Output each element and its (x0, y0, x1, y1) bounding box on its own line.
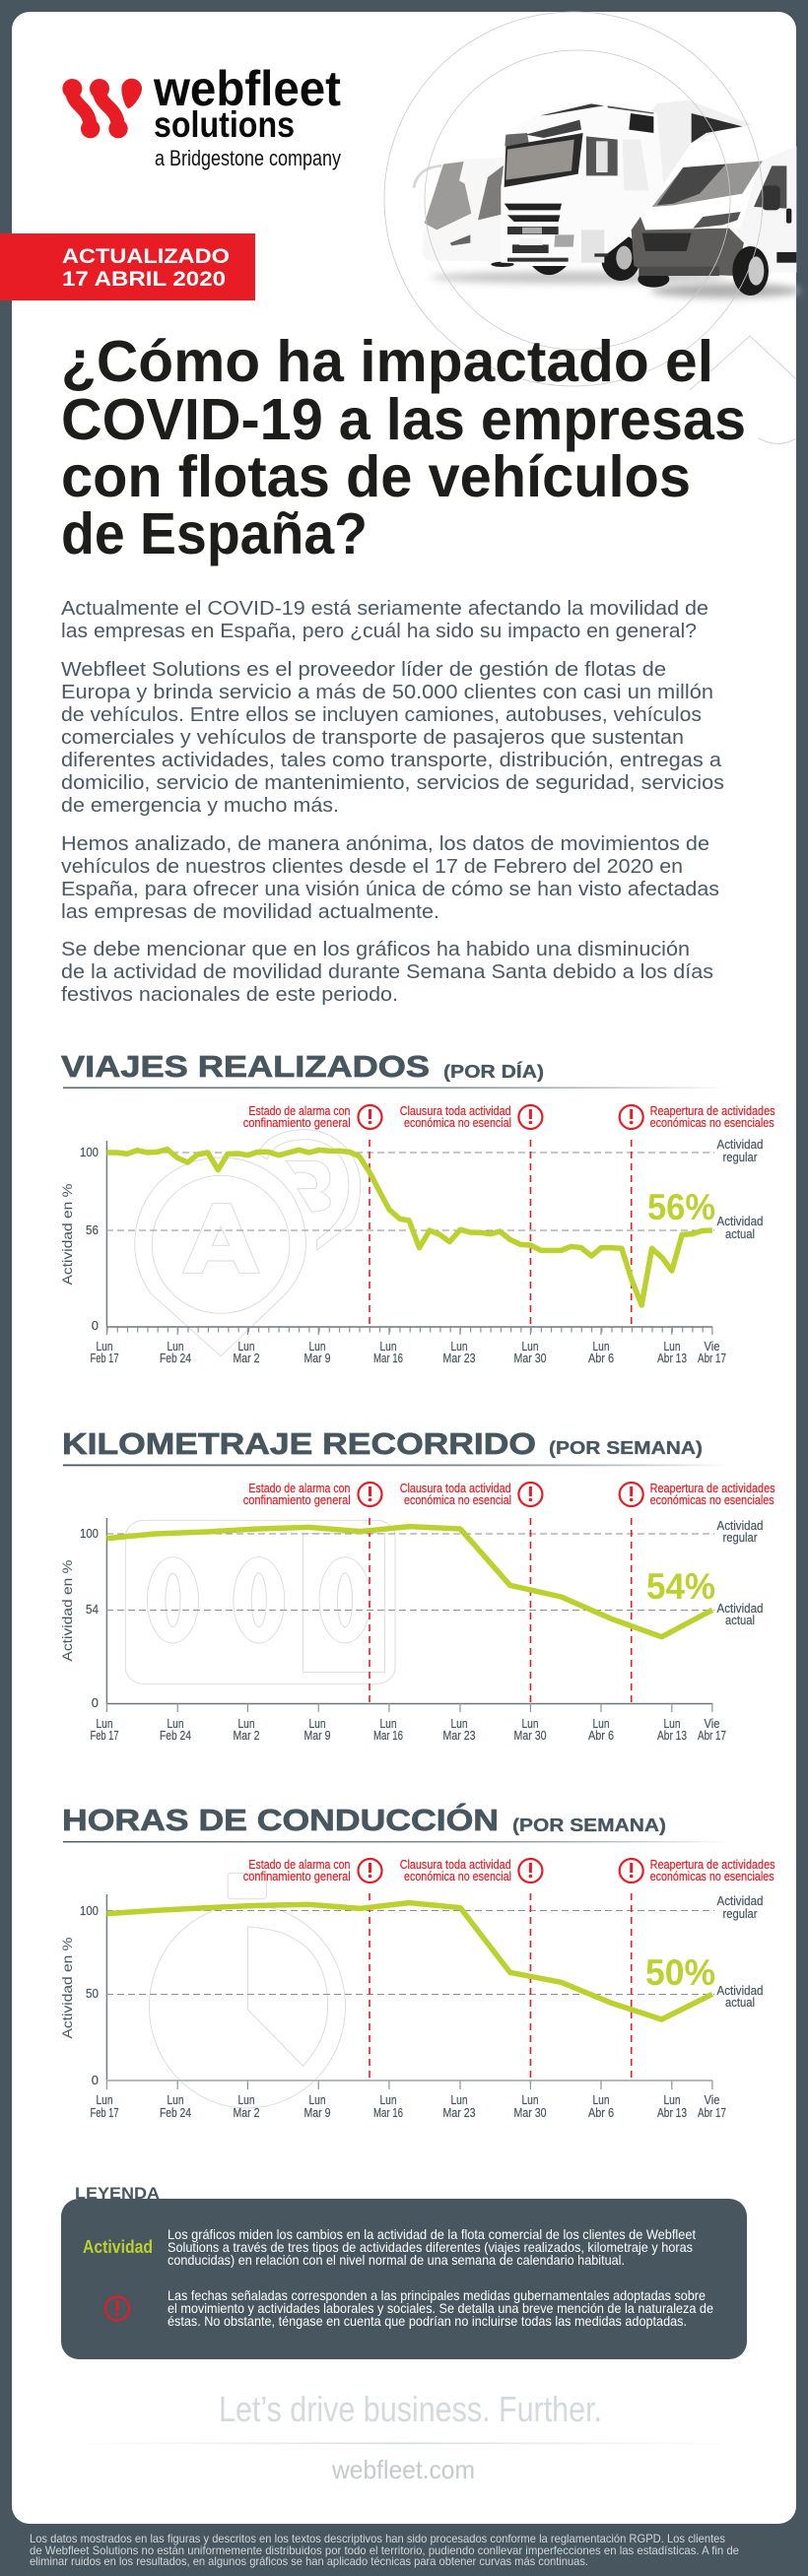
annotation: clausura (400, 1857, 542, 1883)
x axis labels: Mar 23 (443, 1728, 475, 1743)
x axis labels: Lun (664, 1716, 680, 1731)
label: actividad actual (717, 1601, 763, 1627)
label: actividad regular (717, 1137, 763, 1164)
x axis labels: Feb 24 (160, 2105, 191, 2120)
annotation: estado de alarma: confinamiento general (243, 1115, 351, 1130)
intro text: domicilio, servicio de mantenimiento, servicios de seguridad, servicios (61, 772, 724, 794)
annotation: reapertura (620, 1103, 775, 1130)
x axis labels: Mar 2 (233, 1728, 260, 1743)
icon: stopwatch (149, 1873, 346, 2108)
annotation: reapertura (620, 1857, 775, 1883)
x axis labels: Mar 9 (303, 1351, 331, 1365)
hero image: fleet of vehicles (414, 100, 801, 297)
annotation: clausura: económica no esencial (404, 1492, 511, 1507)
y axis labels: 0 (92, 1318, 99, 1333)
x axis labels: Lun (97, 1339, 112, 1354)
x axis labels: Lun (168, 1339, 183, 1354)
line: weekly mileage (106, 1527, 712, 1637)
x axis labels: Mar 2 (233, 2105, 260, 2120)
y axis labels: 0 (92, 1695, 99, 1710)
x axis labels: Feb 17 (91, 1728, 118, 1743)
legend key: actividad: Actividad (83, 2237, 153, 2257)
logo mark (62, 79, 142, 138)
x axis labels: Lun (593, 1339, 609, 1354)
label: actividad regular: Actividad (717, 1137, 763, 1152)
x axis labels: Mar 23 (443, 2105, 475, 2120)
label: actividad actual: Actividad (717, 1601, 763, 1616)
x axis labels: Lun (522, 2092, 538, 2107)
website: webfleet.com (331, 2455, 475, 2484)
legend text: alert: éstas. No obstante, téngase en cuenta que podrían no incluirse todas las medidas adoptadas. (168, 2313, 687, 2329)
value: 56%: 56% (647, 1187, 715, 1227)
intro text: comerciales y vehículos de transporte de pasajeros que sustentan (61, 727, 684, 749)
icon: odometer (125, 1520, 395, 1684)
x axis labels: Lun (309, 1339, 325, 1354)
annotation: clausura: Clausura toda actividad (400, 1103, 511, 1118)
annotation: estado de alarma: Estado de alarma con (248, 1857, 350, 1872)
footer disclaimer: Los datos mostrados en las figuras y descritos en los textos descriptivos han sido procesados conforme la reglamentación RGPD. Los clientes (30, 2532, 725, 2545)
x axis labels: Abr 13 (657, 2105, 687, 2120)
x axis labels: Lun (309, 1716, 325, 1731)
y axis labels: 100 (80, 1903, 99, 1918)
annotation: estado de alarma: Estado de alarma con (248, 1103, 350, 1118)
event markers (370, 1140, 632, 1327)
badge: updated date: 17 ABRIL 2020 (62, 268, 226, 291)
x axis labels: Vie (704, 1716, 719, 1731)
x axis labels: Vie (704, 1339, 719, 1354)
chart axes (106, 1518, 714, 1712)
label: actividad regular: Actividad (717, 1893, 763, 1908)
label: actividad regular (717, 1893, 763, 1921)
legend text: actividad: Solutions a través de tres tipos de actividades diferentes (viajes realizados, kilometraje y horas (168, 2239, 693, 2255)
footer disclaimer (30, 2532, 739, 2568)
intro text: Hemos analizado, de manera anónima, los datos de movimientos de (61, 833, 709, 855)
intro text: de la actividad de movilidad durante Semana Santa debido a los días (61, 961, 713, 983)
intro text: Europa y brinda servicio a más de 50.000 clientes con casi un millón (61, 682, 713, 703)
intro text: de emergencia y mucho más. (61, 795, 339, 817)
x axis labels: Lun (664, 1339, 680, 1354)
x axis labels: Mar 30 (514, 1351, 546, 1365)
legend text: alert: Las fechas señaladas corresponden a las principales medidas gubernamentales adoptadas sobre (168, 2287, 706, 2303)
x axis labels: Feb 24 (160, 1351, 191, 1365)
heading: viajes realizados: (POR DÍA) (443, 1061, 544, 1082)
x axis labels: Lun (238, 2092, 254, 2107)
annotation: clausura (400, 1103, 542, 1130)
x axis labels: Vie (704, 2092, 719, 2107)
label: actividad actual: Actividad (717, 1983, 763, 1998)
event markers (370, 1518, 632, 1703)
heading: horas de conducción: (POR SEMANA) (512, 1816, 666, 1835)
label: actividad actual: actual (725, 1995, 755, 2010)
annotation: reapertura: Reapertura de actividades (650, 1103, 775, 1118)
x axis labels: Abr 6 (588, 2105, 614, 2120)
label: actividad regular (717, 1518, 763, 1545)
x axis labels: Lun (168, 1716, 183, 1731)
label: actividad regular: regular (723, 1906, 758, 1921)
x axis labels: Feb 24 (160, 1728, 191, 1743)
y axis labels: Actividad en % (59, 1183, 75, 1286)
logo wordmark second line: solutions (154, 104, 295, 145)
x axis labels: Mar 30 (514, 1728, 546, 1743)
slogan: Let’s drive business. Further. (219, 2389, 602, 2429)
legend text: alert (168, 2287, 713, 2329)
x axis labels (91, 1339, 726, 1365)
annotation: reapertura: Reapertura de actividades (650, 1481, 775, 1495)
legend text: alert: el movimiento y actividades laborales y sociales. Se detalla una breve mención de la naturaleza de (168, 2300, 713, 2316)
x axis labels: Abr 17 (698, 2105, 726, 2120)
footer disclaimer: de Webfleet Solutions no están uniformemente distribuidos por todo el territorio, pudiendo conllevar imperfecciones en las estadísticas. A fin de (30, 2543, 739, 2557)
annotation: clausura (400, 1481, 542, 1507)
title: COVID-19 a las empresas (61, 387, 746, 452)
label: actividad actual: Actividad (717, 1214, 763, 1228)
chart axes (106, 1141, 714, 1335)
intro text: Actualmente el COVID-19 está seriamente afectando la movilidad de (61, 598, 708, 620)
title (61, 329, 746, 566)
x axis labels: Lun (522, 1339, 538, 1354)
x axis labels: Feb 17 (91, 2105, 118, 2120)
x axis labels: Abr 17 (698, 1351, 726, 1365)
label: actividad regular: Actividad (717, 1518, 763, 1533)
y axis labels: 54 (86, 1602, 99, 1617)
x axis labels: Abr 6 (588, 1351, 614, 1365)
x axis labels: Lun (593, 2092, 609, 2107)
annotation: clausura: Clausura toda actividad (400, 1857, 511, 1872)
footer disclaimer: eliminar ruidos en los resultados, en algunos gráficos se han aplicado técnicas para obtener curvas más continuas. (30, 2554, 588, 2568)
x axis labels: Lun (168, 2092, 183, 2107)
annotation: clausura: económica no esencial (404, 1115, 511, 1130)
icon: location pins A and B (135, 1130, 361, 1356)
y axis labels: 50 (86, 1986, 99, 2001)
logo wordmark: webfleet (153, 61, 341, 116)
x axis labels: Lun (238, 1716, 254, 1731)
x axis labels: Abr 13 (657, 1728, 687, 1743)
x axis labels: Mar 9 (303, 1728, 331, 1743)
heading: kilometraje recorrido: KILOMETRAJE RECORRIDO (62, 1426, 536, 1461)
annotation: estado de alarma (243, 1857, 382, 1883)
y axis labels (59, 1145, 99, 1333)
x axis labels: Lun (380, 1339, 396, 1354)
y axis labels: 0 (92, 2073, 99, 2087)
annotation: reapertura: económicas no esenciales (650, 1115, 774, 1130)
logo tagline: a Bridgestone company (155, 146, 341, 170)
y axis labels: 100 (80, 1145, 99, 1159)
y axis labels: 56 (86, 1222, 99, 1237)
x axis labels: Lun (380, 1716, 396, 1731)
intro text: las empresas en España, pero ¿cuál ha sido su impacto en general? (61, 621, 697, 642)
heading: horas de conducción (62, 1802, 727, 1842)
legend text: actividad: conducidas) en relación con el nivel normal de una semana de calendario habitual. (168, 2252, 625, 2268)
intro text: Webfleet Solutions es el proveedor líder de gestión de flotas de (61, 659, 666, 681)
x axis labels: Mar 16 (373, 1728, 403, 1743)
x axis labels: Lun (451, 1716, 467, 1731)
divider (61, 2443, 747, 2444)
badge: updated date (0, 233, 255, 300)
x axis labels: Lun (593, 1716, 609, 1731)
legend text: actividad: Los gráficos miden los cambios en la actividad de la flota comercial de los clientes de Webfleet (168, 2226, 696, 2242)
annotation: clausura: Clausura toda actividad (400, 1481, 511, 1495)
annotation: estado de alarma: Estado de alarma con (248, 1481, 350, 1495)
panel: legend (61, 2199, 747, 2359)
x axis labels: Lun (522, 1716, 538, 1731)
x axis labels: Mar 23 (443, 1351, 475, 1365)
x axis labels: Lun (238, 1339, 254, 1354)
icon: alert (105, 2297, 129, 2321)
legend heading: LEYENDA (75, 2184, 160, 2203)
annotation: reapertura (620, 1481, 775, 1507)
heading: kilometraje recorrido: (POR SEMANA) (549, 1438, 703, 1458)
x axis labels: Mar 30 (514, 2105, 546, 2120)
event markers (370, 1893, 632, 2081)
intro text: vehículos de nuestros clientes desde el 17 de Febrero del 2020 en (61, 856, 683, 878)
intro text: festivos nacionales de este periodo. (61, 984, 398, 1006)
panel: kilometraje recorrido (59, 1426, 775, 1743)
annotation: reapertura: económicas no esenciales (650, 1869, 774, 1883)
intro text: diferentes actividades, tales como transporte, distribución, entregas a (61, 750, 722, 771)
x axis labels: Lun (451, 1339, 467, 1354)
title: de España? (61, 501, 368, 566)
value: 54%: 54% (646, 1566, 715, 1607)
x axis labels: Feb 17 (91, 1351, 118, 1365)
title: ¿Cómo ha impactado el (61, 329, 713, 394)
annotation: reapertura: económicas no esenciales (650, 1492, 774, 1507)
annotation: estado de alarma (243, 1481, 382, 1507)
panel: horas de conducción (59, 1802, 775, 2120)
title: con flotas de vehículos (61, 444, 691, 509)
label: actividad actual: actual (725, 1226, 755, 1241)
y axis labels: 100 (80, 1526, 99, 1541)
annotation: reapertura: Reapertura de actividades (650, 1857, 775, 1872)
heading: horas de conducción: HORAS DE CONDUCCIÓN (62, 1802, 499, 1837)
value: 50%: 50% (645, 1952, 715, 1993)
x axis labels: Mar 9 (303, 2105, 331, 2120)
x axis labels: Lun (380, 2092, 396, 2107)
intro text: las empresas de movilidad actualmente. (61, 901, 439, 923)
y axis labels (59, 1526, 99, 1710)
annotation: estado de alarma: confinamiento general (243, 1869, 351, 1883)
label: actividad regular: regular (723, 1150, 758, 1164)
heading: viajes realizados: VIAJES REALIZADOS (61, 1049, 430, 1084)
annotation: clausura: económica no esencial (404, 1869, 511, 1883)
intro text: Se debe mencionar que en los gráficos ha habido una disminución (61, 939, 690, 960)
line: weekly driving hours (106, 1903, 712, 2019)
x axis labels: Lun (309, 2092, 325, 2107)
intro text: de vehículos. Entre ellos se incluyen camiones, autobuses, vehículos (61, 704, 702, 726)
label: actividad actual: actual (725, 1613, 755, 1627)
legend text: actividad (168, 2226, 696, 2268)
x axis labels: Mar 16 (373, 2105, 403, 2120)
annotation: estado de alarma: confinamiento general (243, 1492, 351, 1507)
x axis labels: Lun (97, 2092, 112, 2107)
heading: kilometraje recorrido (62, 1426, 727, 1466)
label: actividad actual (717, 1214, 763, 1241)
x axis labels: Lun (97, 1716, 112, 1731)
intro text: España, para ofrecer una visión única de cómo se han visto afectadas (61, 879, 719, 900)
intro text (61, 598, 724, 1006)
y axis labels: Actividad en % (59, 1937, 75, 2039)
x axis labels: Abr 6 (588, 1728, 614, 1743)
decorative steering wheel rings (384, 12, 796, 443)
line: daily trips (106, 1150, 712, 1305)
y axis labels (59, 1903, 99, 2087)
heading: viajes realizados (61, 1049, 727, 1089)
badge: updated date: ACTUALIZADO (62, 245, 230, 268)
x axis labels: Lun (451, 2092, 467, 2107)
x axis labels: Abr 13 (657, 1351, 687, 1365)
y axis labels: Actividad en % (59, 1559, 75, 1662)
x axis labels (91, 2092, 726, 2120)
logo: webfleet solutions (62, 61, 341, 170)
x axis labels: Mar 2 (233, 1351, 260, 1365)
annotation: estado de alarma (243, 1103, 382, 1130)
x axis labels: Abr 17 (698, 1728, 726, 1743)
label: actividad regular: regular (723, 1530, 758, 1545)
x axis labels: Lun (664, 2092, 680, 2107)
x axis labels: Mar 16 (373, 1351, 403, 1365)
chart axes (106, 1894, 714, 2089)
x axis labels (91, 1716, 726, 1743)
panel: viajes realizados (59, 1049, 775, 1365)
label: actividad actual (717, 1983, 763, 2010)
